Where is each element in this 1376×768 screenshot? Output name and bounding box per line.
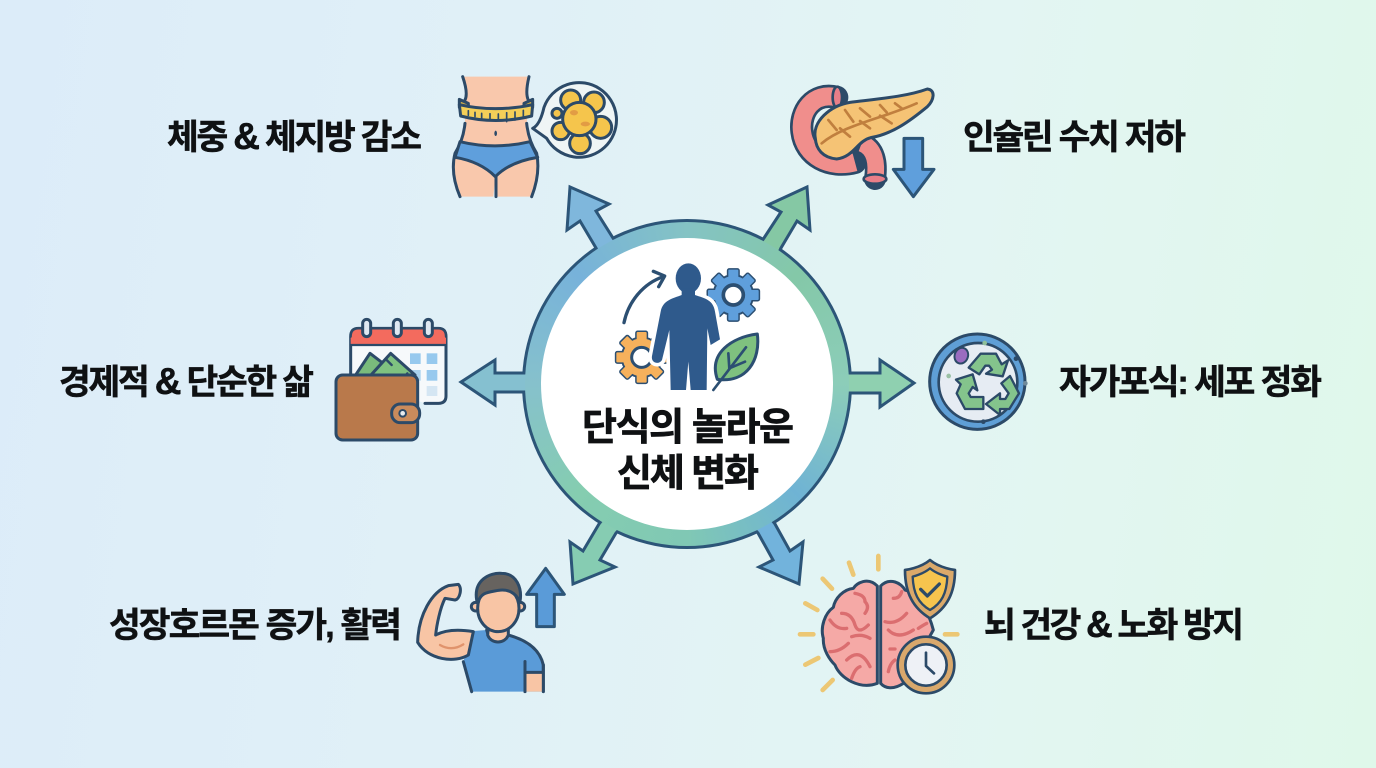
icon: leaf xyxy=(713,334,758,390)
icon: curved arrow xyxy=(624,271,665,323)
icon: blue gear xyxy=(708,270,759,320)
icon: brain with shield and clock xyxy=(800,556,957,693)
label: autophagy: 자가포식: 세포 정화 xyxy=(1059,364,1322,402)
rays xyxy=(800,556,957,690)
icon: recycling petri dish xyxy=(930,334,1028,429)
icon: wallet and calendar xyxy=(336,319,446,440)
title: 신체 변화 xyxy=(617,453,759,495)
center icon: person with gears and leaf xyxy=(616,263,759,390)
label: growth hormone: 성장호르몬 증가, 활력 xyxy=(109,607,402,645)
central ring xyxy=(525,222,849,546)
clock xyxy=(898,637,954,693)
icon: waist with tape and fat cells xyxy=(453,77,616,197)
label: economy and simple life: 경제적 & 단순한 삶 xyxy=(59,361,314,402)
icon: person silhouette xyxy=(652,263,720,390)
label: insulin: 인슐린 수치 저하 xyxy=(963,119,1186,157)
label: weight and body fat: 체중 & 체지방 감소 xyxy=(167,116,422,157)
icon: orange gear xyxy=(616,332,667,383)
icon: pancreas with down arrow xyxy=(802,87,934,197)
label: brain health: 뇌 건강 & 노화 방지 xyxy=(984,604,1244,645)
central white disc xyxy=(541,238,833,530)
title: 단식의 놀라운 xyxy=(582,407,794,449)
title xyxy=(582,407,794,495)
brain xyxy=(822,581,877,685)
icon: flexing man with up arrow xyxy=(418,568,564,692)
shield xyxy=(905,560,955,618)
